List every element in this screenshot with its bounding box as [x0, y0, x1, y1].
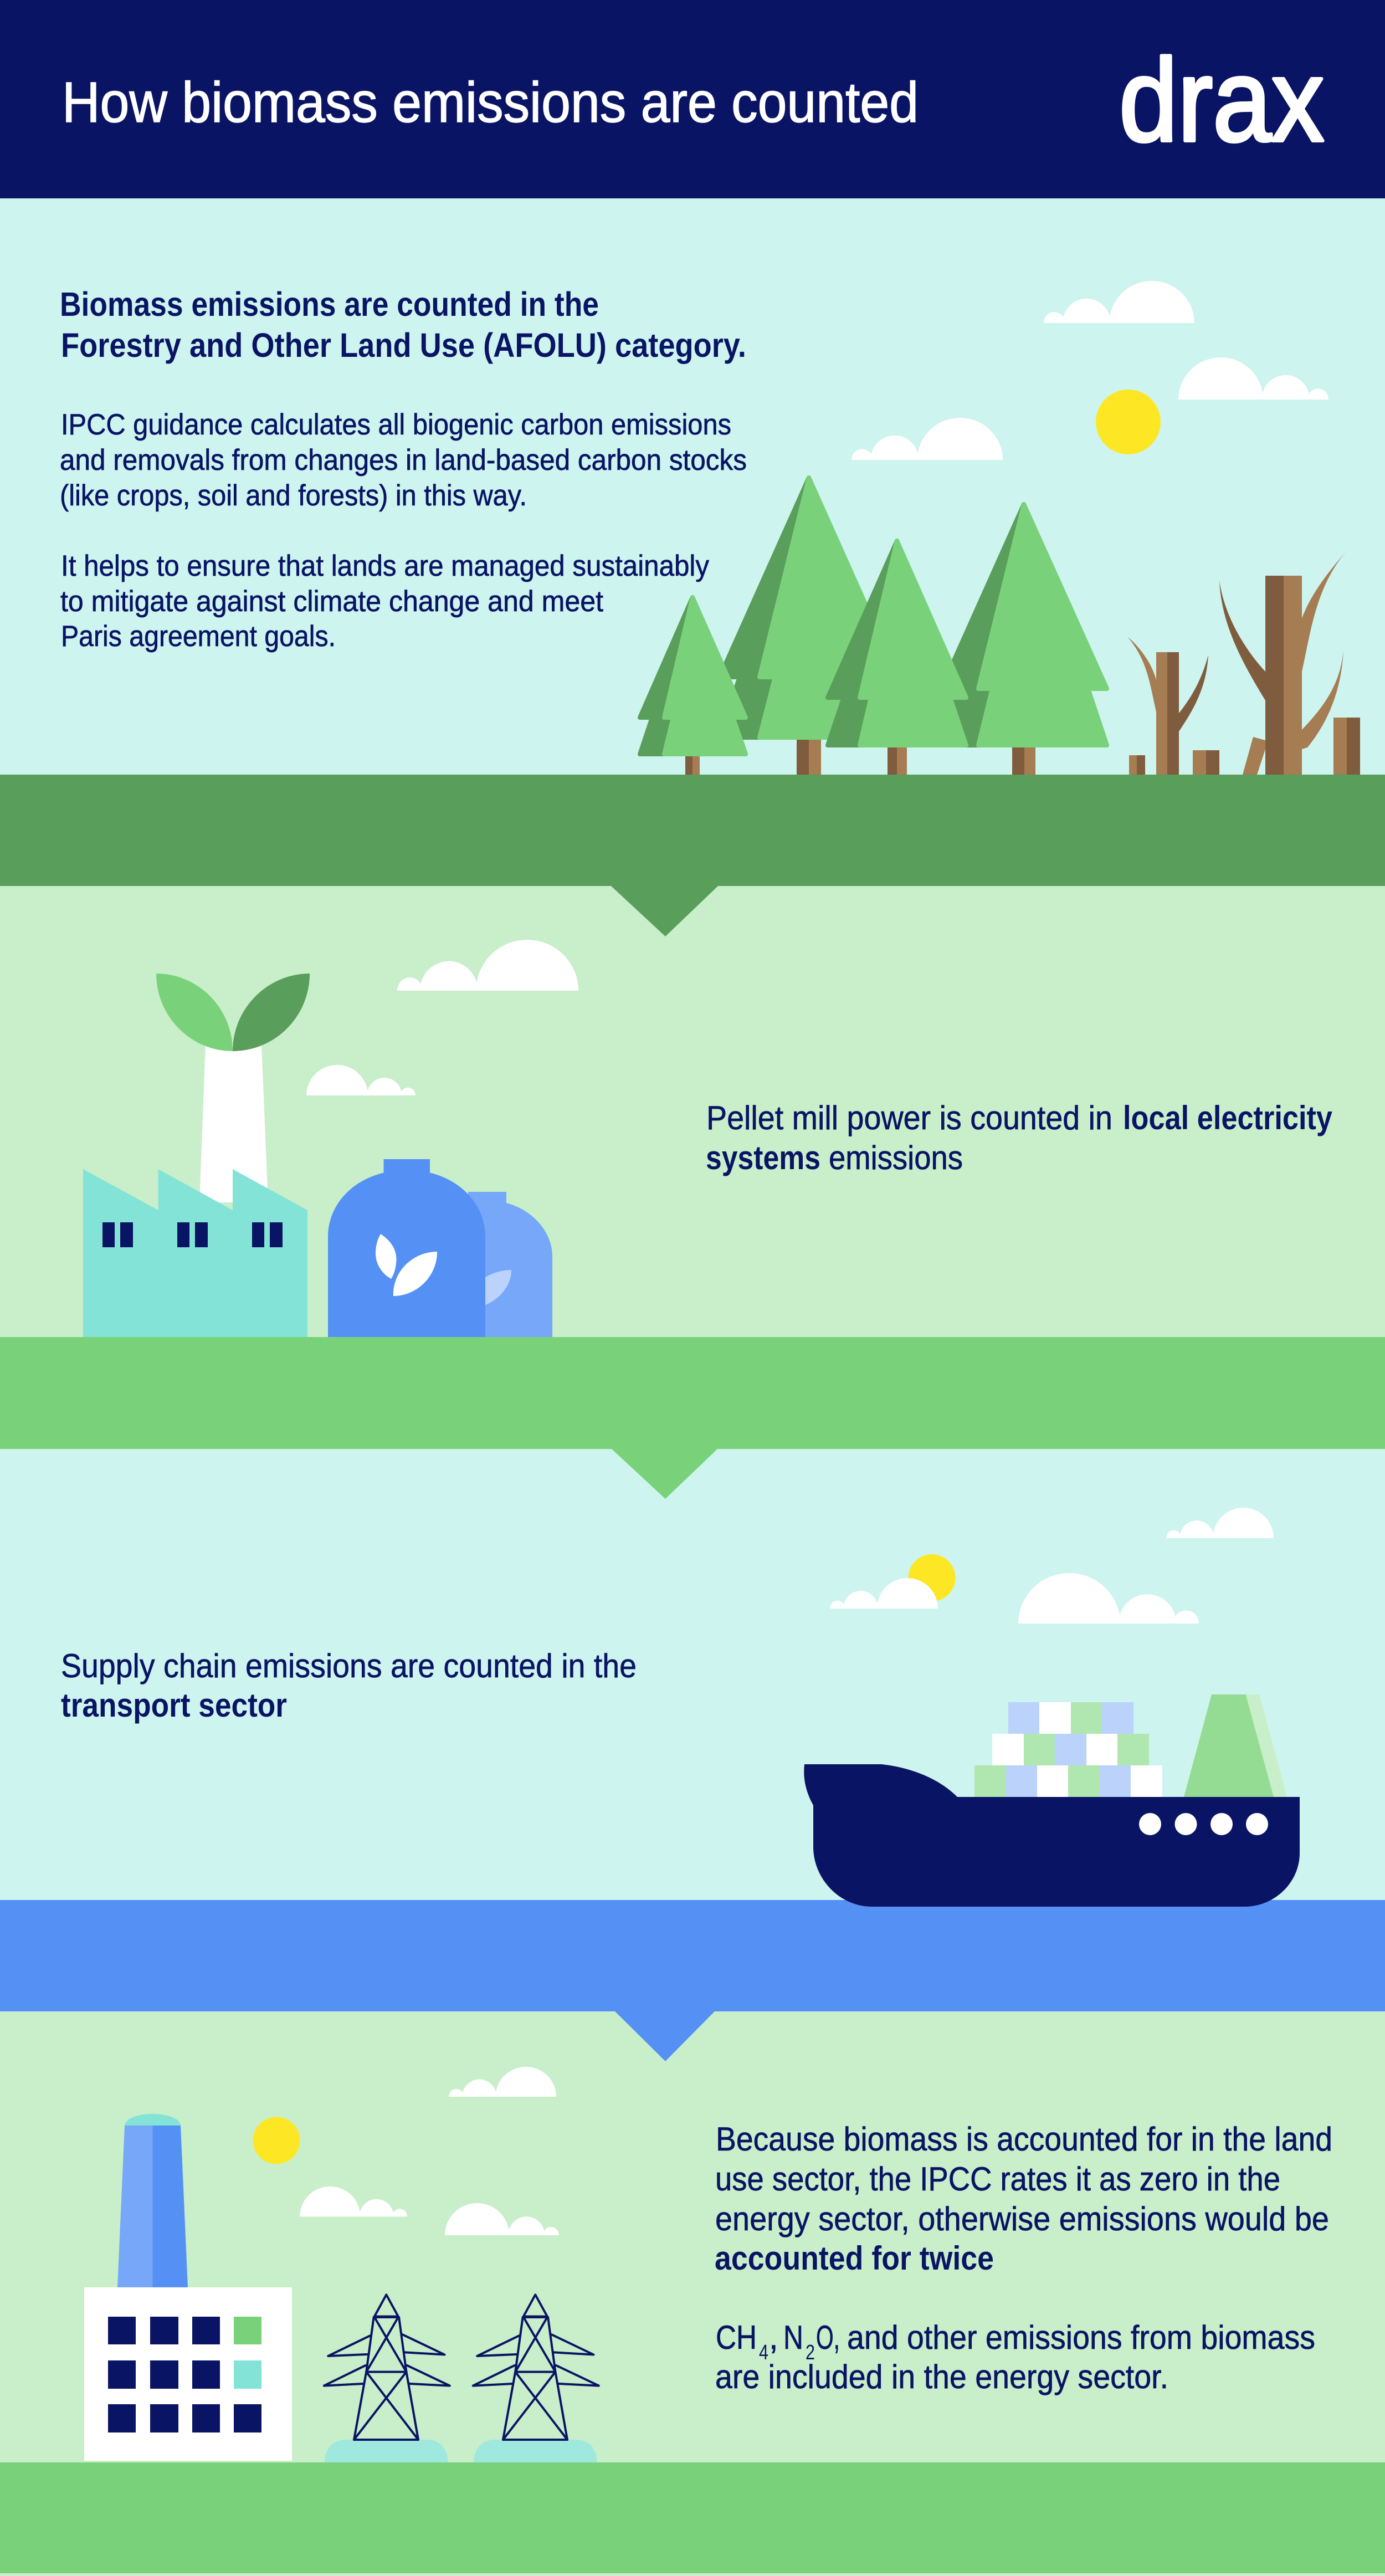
ship containers [974, 1702, 1162, 1797]
icon: sprout leaves [156, 974, 310, 1051]
text block: accounted for twice: accounted for twice [715, 2240, 994, 2277]
text block: other biomass emissions: and other emissions from biomass [847, 2319, 1315, 2356]
panel: section 3 shipping [0, 1448, 1385, 2011]
icon: sun [909, 1554, 955, 1601]
text block: accounted for twice: energy sector, otherwise emissions would be [715, 2200, 1329, 2237]
text block: IPCC guidance [60, 408, 747, 512]
cloud [1166, 1508, 1274, 1538]
text block: IPCC guidance: IPCC guidance calculates all biogenic carbon emissions [61, 408, 731, 441]
heading: AFOLU category: Biomass emissions are counted in the [60, 285, 599, 323]
arrow: forest to pellet mill [611, 886, 718, 936]
text block: other biomass emissions: N [783, 2319, 803, 2356]
text block: IPCC guidance: (like crops, soil and forests) in this way. [60, 479, 527, 512]
text block: IPCC guidance: and removals from changes in land-based carbon stocks [60, 444, 747, 477]
cloud [449, 2067, 556, 2097]
logo: drax: drax [1119, 34, 1324, 166]
text block: pellet mill power [706, 1099, 1333, 1176]
text block: other biomass emissions: 2 [806, 2341, 815, 2364]
cloud [445, 2203, 559, 2235]
icon: rear pellet silo [422, 1192, 552, 1337]
text block: other biomass emissions: CH [716, 2319, 757, 2356]
text block: other biomass emissions: , [769, 2319, 778, 2356]
panel: section 2 pellet mill [0, 886, 1385, 1449]
text block: pellet mill power: local electricity [1123, 1099, 1333, 1136]
icon: front pellet silo [328, 1159, 485, 1337]
text block: transport sector: Supply chain emissions are counted in the [61, 1647, 637, 1684]
ship funnel [1184, 1694, 1287, 1797]
tree: tall back left [720, 478, 898, 775]
heading: AFOLU category [60, 285, 746, 364]
cloud [1178, 357, 1328, 400]
cloud [397, 940, 578, 991]
icon: sun [253, 2117, 300, 2164]
heading: AFOLU category: Forestry and Other Land Use (AFOLU) category. [61, 326, 746, 364]
cloud [851, 418, 1003, 460]
text block: pellet mill power: systems [706, 1139, 820, 1176]
tree: middle [828, 541, 966, 775]
cloud [1018, 1573, 1199, 1624]
ground: energy sector [0, 2462, 1385, 2573]
icon: transmission pylon left [324, 2295, 450, 2462]
ground: pellet mill [0, 1337, 1385, 1449]
arrow: shipping to energy [615, 2011, 715, 2061]
dead tree: tall with branches [1219, 551, 1346, 775]
icon: pellet mill chimney [199, 1044, 268, 1202]
panel: section 1 forest [0, 198, 1385, 886]
text block: other biomass emissions: are included in the energy sector. [715, 2358, 1168, 2395]
icon: factory building [83, 1169, 307, 1337]
text block: sustainable land management: It helps to ensure that lands are managed sustainably [61, 550, 709, 582]
ship hull [804, 1764, 1300, 1907]
text block: transport sector [61, 1647, 637, 1724]
text block: other biomass emissions: O, [816, 2319, 840, 2356]
text block: accounted for twice [715, 2121, 1332, 2277]
cloud [830, 1578, 938, 1609]
text block: transport sector: transport sector [61, 1687, 287, 1724]
text block: accounted for twice: Because biomass is accounted for in the land [716, 2121, 1332, 2158]
text block: other biomass emissions: 4 [759, 2341, 768, 2364]
cloud [300, 2186, 407, 2216]
text block: pellet mill power: Pellet mill power is counted in [706, 1099, 1112, 1136]
text block: pellet mill power: emissions [829, 1139, 963, 1176]
icon: sun [1096, 390, 1161, 454]
text block: sustainable land management: Paris agreement goals. [61, 620, 336, 653]
cloud [1044, 281, 1194, 323]
icon: cargo ship [804, 1694, 1300, 1907]
ship portholes [1139, 1813, 1268, 1835]
title: How biomass emissions are counted [62, 70, 919, 134]
tree: tall back right [941, 504, 1107, 775]
panel: section 4 energy sector [0, 2011, 1385, 2576]
text block: sustainable land management: to mitigate against climate change and meet [60, 585, 603, 618]
dead tree: small with branches [1127, 637, 1208, 775]
arrow: pellet mill to shipping [611, 1448, 718, 1499]
text block: other biomass emissions [715, 2319, 1315, 2395]
tree stumps [1129, 718, 1360, 775]
water [0, 1900, 1385, 2011]
ground: forest [0, 775, 1385, 886]
text block: accounted for twice: use sector, the IPCC rates it as zero in the [715, 2160, 1280, 2198]
cloud [306, 1065, 416, 1095]
text block: sustainable land management [60, 550, 709, 653]
tree: small front [640, 597, 746, 775]
icon: power station building [84, 2287, 292, 2461]
icon: power station chimney [117, 2114, 188, 2287]
icon: transmission pylon right [473, 2295, 599, 2462]
panel: header [0, 0, 1385, 198]
